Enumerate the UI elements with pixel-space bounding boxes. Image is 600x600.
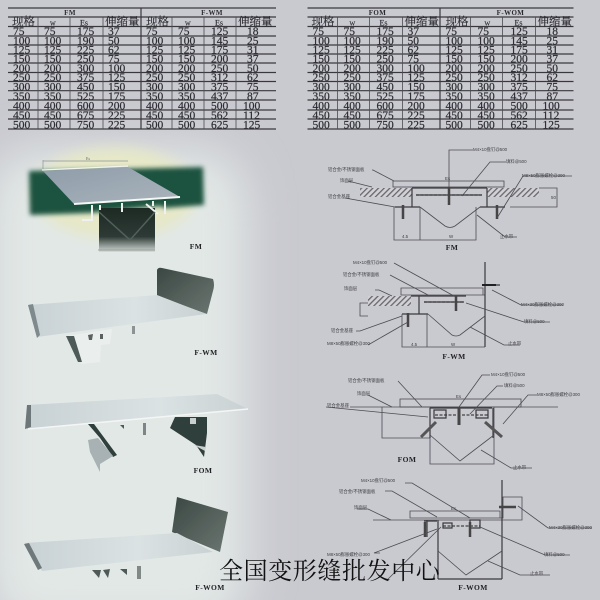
product photo: F-WOM [24,497,228,592]
table: FM and F-WM specifications: 312 [211,72,228,84]
section drawing: FM: 铝合金/不锈钢面板 [328,166,365,173]
table: FM and F-WM specifications: 300 [146,82,164,94]
section drawing: FOM: M8×50膨胀螺栓@300 [537,391,580,398]
table: FOM and F-WOM specifications: 375 [510,82,528,94]
table: FOM and F-WOM specifications [308,8,574,132]
table: FM and F-WM specifications: 50 [108,36,120,48]
section drawing: FOM [326,371,580,471]
table: FM and F-WM specifications: 350 [178,91,196,103]
profile [435,414,488,416]
table: FOM and F-WOM specifications: 400 [344,100,361,112]
table: FOM and F-WOM specifications: 450 [478,110,495,122]
table: FOM and F-WOM specifications: 300 [376,63,394,75]
table: FM and F-WM specifications: 100 [13,36,30,48]
dimension [510,188,557,207]
table: FM and F-WM specifications: 62 [108,44,120,56]
label F-WOM: F-WOM [458,583,488,592]
section drawing: FOM: 铝合金/不锈钢面板 [348,377,385,384]
table: FOM and F-WOM specifications: 600 [376,100,394,112]
table: FM and F-WM specifications: 175 [108,91,126,103]
table: FM and F-WM specifications: 450 [13,110,30,122]
table: FM and F-WM specifications: 250 [178,72,196,84]
table: FM and F-WM specifications: 500 [44,120,62,132]
table: FM and F-WM specifications: 200 [44,63,62,75]
table: FM and F-WM specifications: Es [215,18,223,28]
table: FOM and F-WOM specifications: 225 [376,44,394,56]
section drawing: FM: M4×10盘钉@500 [473,146,508,153]
table: FM and F-WM specifications: 125 [243,120,260,132]
table: FM and F-WM specifications: 750 [77,120,94,132]
legs [66,329,112,364]
table: FM and F-WM specifications: 100 [146,36,164,48]
table: FOM and F-WOM specifications: 400 [478,100,495,112]
dimension line [43,160,155,250]
halo: yellow ground [33,147,197,239]
table: FOM and F-WOM specifications: 150 [446,54,463,66]
table: FOM and F-WOM specifications: 300 [478,82,495,94]
caption: 全国变形缝批发中心 [219,551,441,586]
table: FOM and F-WOM specifications: 300 [344,82,361,94]
table: FOM and F-WOM specifications: 87 [546,91,558,103]
background glow behind product photos [0,150,246,600]
table: FM and F-WM specifications: 145 [211,36,228,48]
table: FM and F-WM specifications: 250 [13,72,30,84]
table: FM and F-WM specifications: 225 [108,110,126,122]
product photo: FM [29,147,204,252]
table: FM and F-WM specifications: 350 [44,91,62,103]
table: FM and F-WM specifications: Es [80,18,88,28]
table: FOM and F-WOM specifications: 375 [376,72,394,84]
table: FM and F-WM specifications: 31 [247,44,259,56]
label F-WM: F-WM [194,348,218,357]
product photo: F-WM [28,268,218,364]
table: FOM and F-WOM specifications: 125 [344,44,361,56]
leader lines [357,483,592,580]
section drawing: F-WM: M8×50膨胀螺栓@300 [327,340,370,347]
table: FOM and F-WOM specifications: 190 [376,36,394,48]
section drawing: F-WM: M4×10盘钉@500 [353,259,388,266]
section drawing: F-WM: 4.5 [411,342,418,347]
table: FOM and F-WOM specifications: 200 [312,63,330,75]
table: FOM and F-WOM specifications: 75 [546,82,558,94]
back wall [172,497,228,552]
section drawing: FOM: M4×10盘钉@500 [491,371,526,378]
table: FOM and F-WOM specifications: 150 [478,54,495,66]
table: FM and F-WM specifications: 50 [247,63,259,75]
table: FOM and F-WOM specifications: 150 [344,54,361,66]
cover plate [401,285,495,295]
table: FM and F-WM specifications: 400 [146,100,164,112]
section drawing: F-WOM: Es [451,506,457,511]
waterstop [430,435,494,461]
section drawing: F-WOM: M8×50膨胀螺栓@300 [327,551,370,558]
table: FM and F-WM specifications: 200 [108,100,126,112]
table: FOM and F-WOM specifications: 125 [510,26,528,38]
table: FM and F-WM specifications: 125 [108,72,126,84]
section drawing: FM: 4.5 [402,234,409,239]
floor line [350,406,558,408]
table: FOM and F-WOM specifications: 100 [312,36,330,48]
section drawing: F-WM: W [451,342,456,347]
table: FM and F-WM specifications: 伸缩量 [238,14,272,28]
table: FM and F-WM specifications: 350 [13,91,30,103]
table: FM and F-WM specifications: 600 [77,100,94,112]
product photo: FM: Es [86,156,90,161]
table: FOM and F-WOM specifications: 300 [446,82,463,94]
table: FM and F-WM specifications: 225 [77,44,94,56]
table: FOM and F-WOM specifications: 562 [510,110,528,122]
table: FM and F-WM specifications: W [185,22,191,28]
profile and fasteners [395,188,505,207]
table: FOM and F-WOM specifications: FOM [369,9,386,17]
table: FOM and F-WOM specifications: 150 [408,82,425,94]
table: FOM and F-WOM specifications: 37 [546,54,558,66]
section drawing: FOM: 填料@500 [504,382,525,389]
product photo: FOM [25,394,248,475]
table: FM and F-WM specifications: 125 [13,44,30,56]
pit outline [394,207,476,240]
table: FOM and F-WOM specifications: 675 [376,110,394,122]
section drawing: FM: 饰面层 [340,177,354,184]
table: FM and F-WM specifications: 250 [44,72,62,84]
cover plate [400,399,521,407]
leader lines [326,375,537,468]
table: FM and F-WM specifications: 100 [44,36,62,48]
table: FM and F-WM specifications: 675 [77,110,94,122]
section drawing: FM: Es [445,176,451,181]
table: FM and F-WM specifications: 75 [146,26,158,38]
table: FOM and F-WOM specifications: 125 [478,44,495,56]
table: FOM and F-WOM specifications: 75 [312,26,324,38]
table: FOM and F-WOM specifications: 250 [344,72,361,84]
table: FOM and F-WOM specifications: 伸缩量 [538,14,572,28]
section drawing: F-WM: 铝合金/不锈钢面板 [343,271,380,278]
table: FOM and F-WOM specifications: 125 [312,44,330,56]
table: FOM and F-WOM specifications: 150 [312,54,330,66]
section drawing: F-WM: 止水带 [508,340,522,347]
table: FM and F-WM specifications: 400 [13,100,30,112]
table: FOM and F-WOM specifications: 225 [408,120,425,132]
table: FM and F-WM specifications: 375 [77,72,94,84]
table: FM and F-WM specifications: 112 [243,110,260,122]
table: FM and F-WM specifications: 75 [178,26,190,38]
table: FOM and F-WOM specifications: 125 [408,72,425,84]
table: FM and F-WM specifications: 62 [247,72,259,84]
table: FOM and F-WOM specifications: 350 [344,91,361,103]
table: FOM and F-WOM specifications: 400 [446,100,463,112]
table: FM and F-WM specifications: 437 [211,91,228,103]
table: FM and F-WM specifications: 175 [77,26,94,38]
table: FM and F-WM specifications: 75 [44,26,56,38]
table: FOM and F-WOM specifications: 525 [376,91,394,103]
section drawing: FM: 止水带 [500,233,514,240]
table: FM and F-WM specifications: 125 [178,44,196,56]
table: FOM and F-WOM specifications: 75 [446,26,457,38]
table: FOM and F-WOM specifications: 500 [312,120,330,132]
back wall [157,268,214,314]
table: FOM and F-WOM specifications: 175 [510,44,528,56]
table: FOM and F-WOM specifications: 450 [446,110,463,122]
section drawing: FM: 铝合金基座 [328,193,351,200]
table: FM and F-WM specifications: 375 [211,82,228,94]
waterstop [438,551,502,575]
table: FOM and F-WOM specifications: 500 [478,120,495,132]
table: FOM and F-WOM specifications: 31 [546,44,558,56]
label FOM: FOM [194,466,212,475]
table: FM and F-WM specifications: 562 [211,110,228,122]
table: FOM and F-WOM specifications: 50 [546,63,558,75]
table: FOM and F-WOM specifications: 250 [510,63,528,75]
table: FOM and F-WOM specifications: 250 [376,54,394,66]
table: FOM and F-WOM specifications: 500 [510,100,528,112]
table: FM and F-WM specifications: 100 [243,100,260,112]
table: FM and F-WM specifications: 250 [146,72,164,84]
table: FOM and F-WOM specifications: 350 [312,91,330,103]
table: FM and F-WM specifications: 200 [178,63,196,75]
left legs [88,424,117,457]
table: FOM and F-WOM specifications: 100 [478,36,495,48]
cover plate [410,497,522,520]
table: FOM and F-WOM specifications: 750 [376,120,394,132]
section drawing: F-WM: M4×30膨胀螺栓@300 [521,301,564,308]
hatched slabs [360,188,412,197]
table: FM and F-WM specifications: 150 [13,54,30,66]
table: FM and F-WM specifications: 25 [247,36,259,48]
section drawing: F-WOM: 填料@500 [544,551,565,558]
table: FOM and F-WOM specifications: 125 [542,120,560,132]
wall line [482,262,500,347]
table: FM and F-WM specifications: 450 [146,110,164,122]
table: FM and F-WM specifications: W [50,22,56,28]
table: FM and F-WM specifications: 350 [146,91,164,103]
table: FOM and F-WOM specifications: 175 [408,91,425,103]
table: FOM and F-WOM specifications: Es [514,18,522,28]
table: FM and F-WM specifications: 400 [178,100,196,112]
table: FM and F-WM specifications: 200 [13,63,30,75]
section drawing: FM: 填料@500 [506,158,527,165]
profile stubs [92,570,101,578]
table: FM and F-WM specifications: 300 [44,82,62,94]
table: FM and F-WM specifications: 125 [146,44,164,56]
table: FM and F-WM specifications [8,8,276,132]
table: FM and F-WM specifications: 18 [247,26,259,38]
table: FOM and F-WOM specifications: 200 [408,100,425,112]
label F-WM: F-WM [442,352,466,361]
table: FOM and F-WOM specifications: 62 [546,72,558,84]
table: FM and F-WM specifications: 125 [44,44,62,56]
section drawing: F-WOM: 铝合金/不锈钢面板 [339,488,376,495]
table: FM and F-WM specifications: 300 [13,82,30,94]
table: FOM and F-WOM specifications: 500 [446,120,463,132]
wall [501,480,503,579]
table: FOM and F-WOM specifications: 100 [446,36,463,48]
table: FOM and F-WOM specifications: 312 [510,72,528,84]
table: FM and F-WM specifications: 625 [211,120,228,132]
table: FOM and F-WOM specifications: 175 [376,26,394,38]
section drawing: F-WM: 填料@500 [524,318,545,325]
table: FM and F-WM specifications: 75 [13,26,25,38]
table: FOM and F-WOM specifications: 200 [344,63,361,75]
table: FOM and F-WOM specifications: 50 [408,36,419,48]
table: FM and F-WM specifications: 300 [178,82,196,94]
label F-WOM: F-WOM [195,583,225,592]
table: FM and F-WM specifications: 200 [211,54,228,66]
table: FM and F-WM specifications: 500 [13,120,30,132]
floor line [373,519,500,521]
section drawing: F-WM: 铝合金基座 [331,327,354,334]
table: FM and F-WM specifications: 37 [247,54,259,66]
table: FOM and F-WOM specifications: 100 [344,36,361,48]
table: FM and F-WM specifications: 175 [211,44,228,56]
table: FM and F-WM specifications: 300 [77,63,94,75]
section drawing: F-WM [327,259,564,361]
section drawing: FOM: 铝合金基座 [327,402,350,409]
table: FM and F-WM specifications: 37 [108,26,120,38]
table: FOM and F-WOM specifications: F-WOM [497,9,524,17]
table: FM and F-WM specifications: 450 [77,82,94,94]
section drawing: FOM: 止水带 [513,464,527,471]
table: FOM and F-WOM specifications: 350 [478,91,495,103]
plate [27,394,248,429]
table: FM and F-WM specifications: 525 [77,91,94,103]
green slab [29,167,204,215]
table: FOM and F-WOM specifications: 75 [344,26,355,38]
table: FOM and F-WOM specifications: 200 [478,63,495,75]
section drawing: F-WOM: 饰面层 [354,504,368,511]
table: FM and F-WM specifications: 75 [108,54,120,66]
table: FOM and F-WOM specifications: 225 [408,110,425,122]
table: FM and F-WM specifications: 75 [247,82,259,94]
table: FM and F-WM specifications: 500 [178,120,196,132]
table: FM and F-WM specifications: 250 [211,63,228,75]
profile [402,296,466,314]
dark right profile [170,417,207,457]
table: FM and F-WM specifications: 100 [178,36,196,48]
table: FM and F-WM specifications: 500 [146,120,164,132]
table: FM and F-WM specifications: 87 [247,91,259,103]
leader lines [345,150,572,237]
table: FM and F-WM specifications: 450 [178,110,196,122]
table: FOM and F-WOM specifications: 75 [408,54,419,66]
section drawing: F-WOM [327,477,592,592]
table: FM and F-WM specifications: 伸缩量 [105,14,140,28]
table: FOM and F-WOM specifications: 300 [312,82,330,94]
table: FM and F-WM specifications: F-WM [201,9,223,17]
table: FM and F-WM specifications: 450 [44,110,62,122]
label FM: FM [446,243,458,252]
table: FM and F-WM specifications: 225 [108,120,126,132]
table: FM and F-WM specifications: 150 [44,54,62,66]
opening pit [99,208,155,252]
section drawing: FM [328,146,572,252]
table: FM and F-WM specifications: 190 [77,36,94,48]
table: FOM and F-WOM specifications: W [350,22,356,28]
table: FOM and F-WOM specifications: Es [380,18,388,28]
table: FOM and F-WOM specifications: 450 [344,110,361,122]
table: FOM and F-WOM specifications: W [484,22,490,28]
table: FOM and F-WOM specifications: 200 [510,54,528,66]
table: FOM and F-WOM specifications: 400 [312,100,330,112]
table: FOM and F-WOM specifications: 450 [376,82,394,94]
table: FOM and F-WOM specifications: 250 [478,72,495,84]
aluminium profile [82,201,165,220]
table: FM and F-WM specifications: 150 [178,54,196,66]
label FOM: FOM [398,455,416,464]
plate top [28,295,206,337]
table: FOM and F-WOM specifications: 625 [510,120,528,132]
table: FM and F-WM specifications: 250 [77,54,94,66]
section drawing: FOM: Es [456,394,462,399]
table: FM and F-WM specifications: 150 [146,54,164,66]
table: FM and F-WM specifications: 100 [108,63,126,75]
section drawing: F-WOM: M4×10盘钉@500 [361,477,396,484]
table: FOM and F-WOM specifications: 145 [510,36,528,48]
leader lines [356,263,563,345]
table: FOM and F-WOM specifications: 350 [446,91,463,103]
table: FM and F-WM specifications: 现格 [12,14,35,28]
table: FOM and F-WOM specifications: 125 [446,44,463,56]
table: FM and F-WM specifications: 125 [211,26,228,38]
label FM: FM [190,242,202,251]
section drawing: FM: M8×50膨胀螺栓@300 [522,172,565,179]
table: FOM and F-WOM specifications: 200 [446,63,463,75]
cover plate [393,181,504,187]
table: FOM and F-WOM specifications: 100 [542,100,560,112]
table: FM and F-WM specifications: 500 [211,100,228,112]
table: FM and F-WM specifications: FM [64,9,76,17]
section drawing: FM: W [449,234,454,239]
table: FOM and F-WOM specifications: 450 [312,110,330,122]
section drawing: F-WOM: M4×30膨胀螺栓@300 [549,524,592,531]
table: FOM and F-WOM specifications: 现格 [312,14,335,28]
table: FOM and F-WOM specifications: 250 [312,72,330,84]
table: FOM and F-WOM specifications: 112 [542,110,560,122]
table: FOM and F-WOM specifications: 100 [408,63,425,75]
slab block [382,407,494,464]
table: FOM and F-WOM specifications: 437 [510,91,528,103]
table: FOM and F-WOM specifications: 伸缩量 [404,14,439,28]
table: FOM and F-WOM specifications: 500 [344,120,361,132]
pit outline [402,314,485,347]
section drawing: F-WOM: 止水带 [530,570,544,577]
plate [25,533,213,571]
plate top [43,167,180,204]
table: FM and F-WM specifications: 现格 [146,14,169,28]
section drawing: FOM: 饰面层 [357,390,371,397]
section drawing: FM: 50 [551,195,556,200]
table: FOM and F-WOM specifications: 37 [408,26,419,38]
table: FOM and F-WOM specifications: 现格 [446,14,469,28]
waterstop [420,207,480,228]
table: FOM and F-WOM specifications: 75 [478,26,489,38]
section drawing: F-WM: 饰面层 [344,285,358,292]
waterstop [428,314,485,336]
table: FM and F-WM specifications: 150 [108,82,126,94]
table: FOM and F-WOM specifications: 18 [546,26,558,38]
profile [424,520,502,579]
table: FM and F-WM specifications: 200 [146,63,164,75]
table: FM and F-WM specifications: 400 [44,100,62,112]
table: FOM and F-WOM specifications: 250 [446,72,463,84]
table: FOM and F-WOM specifications: 25 [546,36,558,48]
table: FOM and F-WOM specifications: 62 [408,44,419,56]
hatched slab [368,296,411,306]
